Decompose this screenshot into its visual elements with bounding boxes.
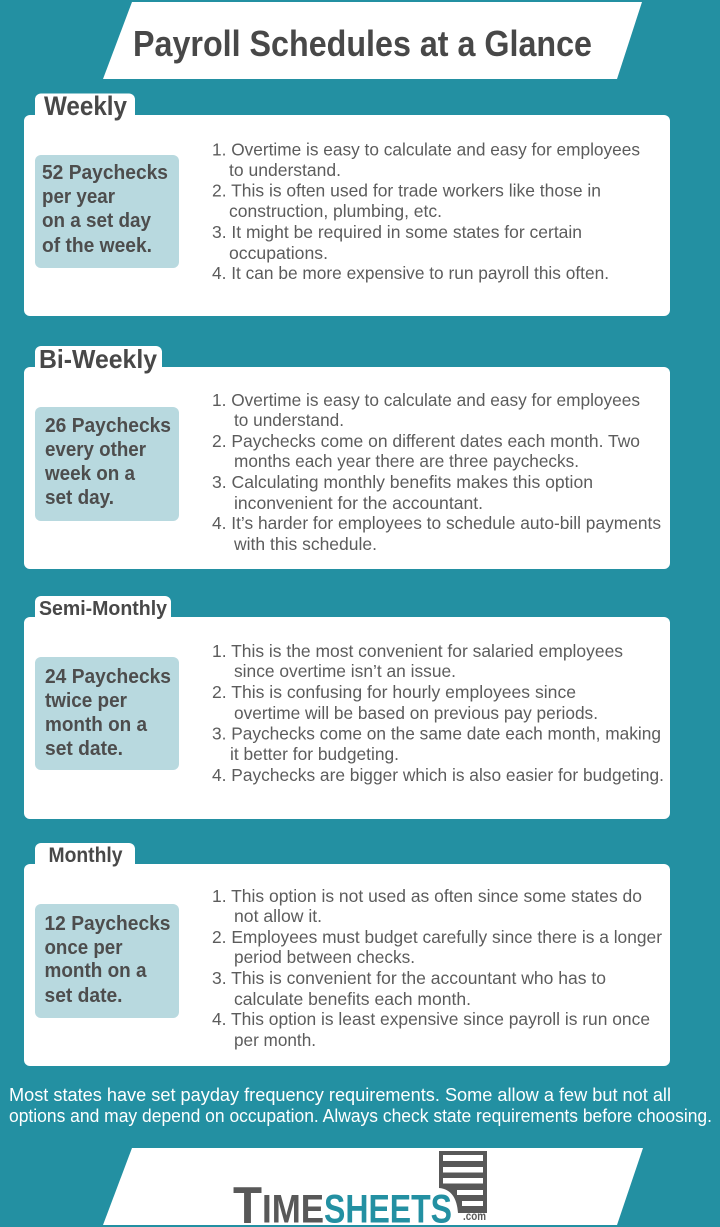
callout: 52 paychecks: per year: [42, 185, 115, 208]
list: weekly points: 4. It can be more expensive to run payroll this often.: [212, 263, 609, 283]
list: weekly points: [212, 140, 640, 283]
list: weekly points: occupations.: [229, 243, 328, 263]
list: monthly points: 2. Employees must budget carefully since there is a longer: [212, 927, 662, 947]
list: bi-weekly points: inconvenient for the accountant.: [234, 493, 483, 513]
callout: 12 paychecks: set date.: [44, 984, 122, 1007]
list: monthly points: calculate benefits each month.: [234, 989, 471, 1009]
title banner: [103, 2, 642, 79]
list: bi-weekly points: [212, 390, 661, 554]
list: semi-monthly points: 1. This is the most convenient for salaried employees: [212, 641, 623, 661]
callout: 24 paychecks: twice per: [45, 689, 127, 712]
callout: 24 paychecks: month on a: [45, 713, 148, 736]
list: monthly points: 4. This option is least expensive since payroll is run once: [212, 1009, 650, 1029]
list: monthly points: 1. This option is not used as often since some states do: [212, 886, 642, 906]
list: monthly points: not allow it.: [234, 906, 322, 926]
list: semi-monthly points: it better for budgeting.: [230, 744, 399, 764]
callout: 52 paychecks: of the week.: [42, 234, 152, 257]
title banner: Payroll Schedules at a Glance: [133, 23, 592, 64]
panel: monthly: [24, 843, 670, 1066]
panel: semi-monthly: [24, 596, 670, 819]
list: monthly points: period between checks.: [234, 947, 415, 967]
panel: bi-weekly: [24, 344, 670, 569]
list: bi-weekly points: 4. It’s harder for employees to schedule auto-bill payments: [212, 513, 661, 533]
logo wordmark: .com: [463, 1209, 486, 1223]
callout: 52 paychecks: [35, 155, 179, 268]
callout: 26 paychecks: 26 Paychecks: [45, 414, 171, 437]
callout: 24 paychecks: [35, 657, 179, 770]
callout: 26 paychecks: [35, 407, 179, 521]
callout: 26 paychecks: every other: [45, 438, 146, 461]
footer note: [9, 1085, 712, 1126]
list: semi-monthly points: 2. This is confusing for hourly employees since: [212, 682, 576, 702]
list: weekly points: 1. Overtime is easy to calculate and easy for employees: [212, 140, 640, 160]
callout: 52 paychecks: on a set day: [42, 209, 152, 232]
heading: semi-monthly: Semi-Monthly: [39, 598, 168, 620]
footer banner with logo: [103, 1148, 643, 1227]
heading: weekly: Weekly: [44, 91, 127, 121]
list: semi-monthly points: 4. Paychecks are bigger which is also easier for budgeting.: [212, 765, 664, 785]
list: semi-monthly points: since overtime isn’t an issue.: [234, 661, 456, 681]
list: monthly points: [212, 886, 662, 1050]
callout: 12 paychecks: 12 Paychecks: [44, 912, 170, 935]
list: bi-weekly points: to understand.: [234, 410, 344, 430]
panel: weekly: [24, 91, 670, 316]
callout: 24 paychecks: 24 Paychecks: [45, 665, 171, 688]
list: bi-weekly points: 2. Paychecks come on different dates each month. Two: [212, 431, 640, 451]
callout: 52 paychecks: 52 Paychecks: [42, 161, 168, 184]
list: weekly points: 2. This is often used for trade workers like those in: [212, 180, 601, 200]
callout: 12 paychecks: month on a: [44, 959, 147, 982]
list: semi-monthly points: 3. Paychecks come on the same date each month, making: [212, 724, 661, 744]
callout: 26 paychecks: week on a: [44, 462, 136, 485]
callout: 26 paychecks: set day.: [45, 486, 114, 509]
list: bi-weekly points: with this schedule.: [233, 534, 377, 554]
footer note: Most states have set payday frequency requirements. Some allow a few but not all: [9, 1085, 671, 1105]
callout: 24 paychecks: set date.: [45, 737, 123, 760]
list: weekly points: 3. It might be required in some states for certain: [212, 222, 582, 242]
list: monthly points: per month.: [234, 1030, 316, 1050]
footer note: options and may depend on occupation. Always check state requirements before choosing.: [9, 1106, 712, 1126]
callout: 12 paychecks: once per: [44, 936, 123, 959]
list: bi-weekly points: 1. Overtime is easy to calculate and easy for employees: [212, 390, 640, 410]
list: monthly points: 3. This is convenient for the accountant who has to: [212, 968, 606, 988]
icon: timesheet document: [439, 1151, 487, 1213]
list: weekly points: construction, plumbing, etc.: [229, 201, 442, 221]
list: semi-monthly points: overtime will be based on previous pay periods.: [234, 703, 598, 723]
list: semi-monthly points: [212, 641, 664, 785]
logo wordmark: [233, 1177, 486, 1227]
callout: 12 paychecks: [35, 904, 179, 1018]
list: weekly points: to understand.: [229, 160, 341, 180]
list: bi-weekly points: months each year there are three paychecks.: [234, 451, 579, 471]
list: bi-weekly points: 3. Calculating monthly benefits makes this option: [212, 472, 593, 492]
heading: bi-weekly: Bi-Weekly: [39, 344, 158, 374]
heading: monthly: Monthly: [48, 844, 123, 867]
